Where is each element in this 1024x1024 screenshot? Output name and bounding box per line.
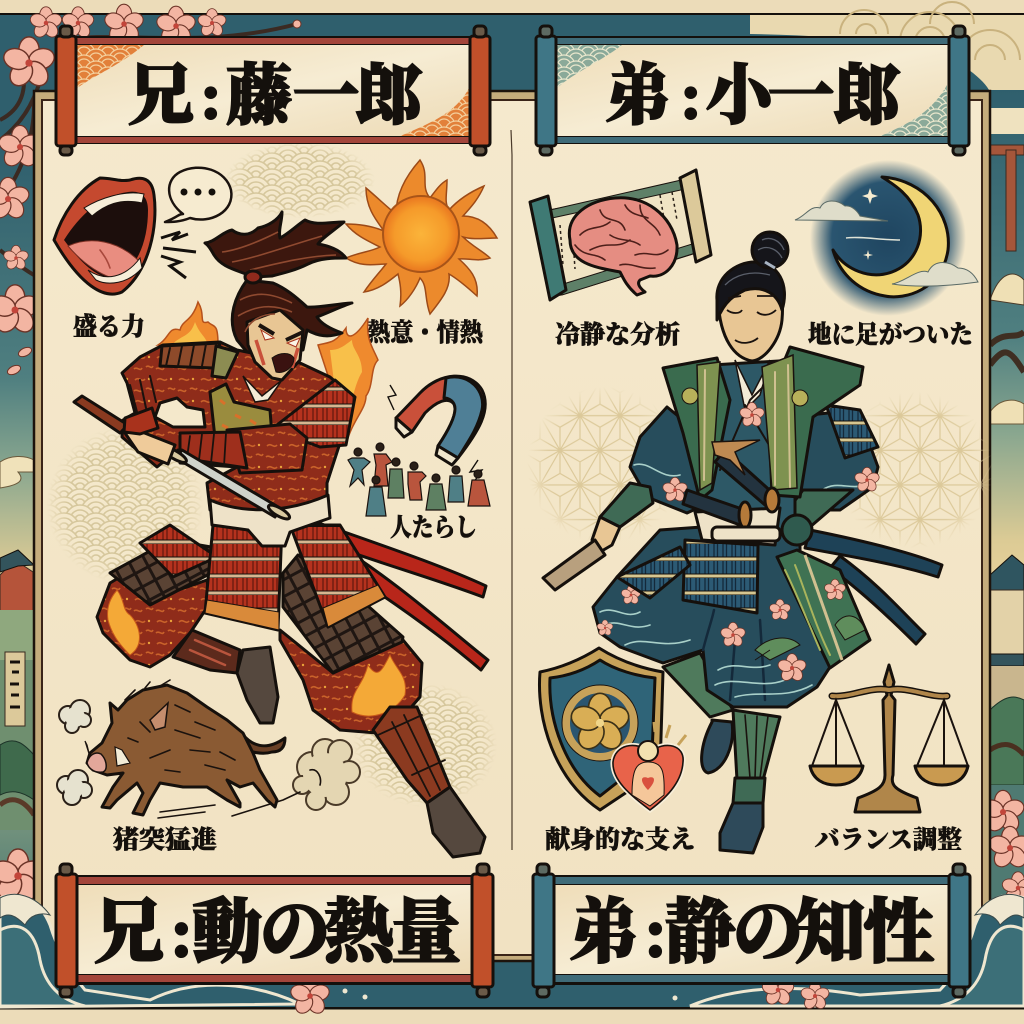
icon: charging boar bbox=[57, 680, 360, 818]
swords at waist bbox=[683, 450, 780, 541]
icon: speech bubble bbox=[165, 168, 231, 222]
banner: 弟 小一郎 bbox=[536, 26, 969, 155]
banner: 兄 動の熱量 bbox=[56, 864, 493, 997]
wooden sign bbox=[5, 652, 25, 726]
hair rear bbox=[232, 280, 352, 352]
label: 献身的な支え: 献身的な支え bbox=[545, 825, 695, 854]
icon: sun bbox=[346, 160, 497, 314]
forearm bbox=[180, 432, 247, 468]
banner: 兄 藤一郎 bbox=[56, 26, 490, 155]
kimono body bbox=[700, 360, 795, 530]
chain mesh skirts bbox=[110, 540, 217, 605]
wrist guard bbox=[782, 515, 812, 545]
upper arm stripes bbox=[130, 376, 156, 412]
icon: shouting mouth bbox=[54, 178, 155, 294]
sleeves bbox=[630, 407, 715, 513]
label: 地に足がついた: 地に足がついた bbox=[808, 321, 973, 349]
centre divider bbox=[511, 130, 512, 850]
icon: shield with crest bbox=[539, 648, 663, 810]
hand bbox=[123, 430, 175, 464]
left landscape strip bbox=[0, 150, 34, 910]
head bbox=[718, 268, 783, 361]
banner: 兄 藤一郎: 兄:藤一郎 bbox=[128, 60, 422, 133]
front shin and foot bbox=[733, 710, 780, 780]
label: 盛る力: 盛る力 bbox=[73, 312, 145, 341]
forearms bbox=[600, 483, 653, 527]
younger samurai 小一郎 bbox=[543, 232, 942, 853]
icon: balance scale bbox=[810, 665, 968, 812]
puffs of breath and dust bbox=[57, 700, 360, 816]
banner: 弟 小一郎: 弟:小一郎 bbox=[605, 60, 900, 133]
gap under arm bbox=[155, 398, 205, 427]
sleeve bbox=[227, 424, 307, 473]
rollers bbox=[56, 26, 490, 155]
rollers bbox=[536, 26, 969, 155]
shoulder guard bbox=[273, 380, 355, 447]
icon: crowd of people bbox=[348, 443, 490, 516]
face bbox=[247, 310, 303, 380]
label: 冷静な分析: 冷静な分析 bbox=[555, 321, 680, 349]
rollers bbox=[533, 864, 970, 997]
armoured torso and arm silhouette bbox=[122, 342, 353, 517]
hemp-leaf pattern circles bbox=[527, 387, 993, 548]
icon: crescent moon and night sky bbox=[795, 160, 978, 316]
sword bbox=[74, 396, 291, 521]
belly armour and sash bbox=[695, 508, 780, 545]
banner: 弟 静の知性 bbox=[533, 864, 970, 997]
collar bbox=[243, 376, 282, 402]
icon: heart with figure bbox=[613, 722, 686, 810]
icon: brain on scroll bbox=[530, 170, 711, 300]
green vest bbox=[663, 358, 730, 500]
icon: shout lines bbox=[161, 232, 196, 278]
hair plume bbox=[205, 212, 346, 277]
front leg bbox=[280, 630, 422, 733]
parchment panel bbox=[34, 91, 990, 961]
elder samurai 藤一郎 bbox=[74, 212, 488, 857]
back leg bbox=[663, 653, 733, 717]
back leg bbox=[97, 577, 210, 667]
sakura branch left bbox=[0, 4, 301, 904]
label: バランス調整: バランス調整 bbox=[815, 826, 962, 854]
label: 熱意・情熱: 熱意・情熱 bbox=[367, 319, 486, 347]
hakama bbox=[593, 520, 830, 707]
tassets bbox=[140, 525, 385, 630]
scabbards bbox=[278, 510, 488, 670]
banner: 弟 静の知性: 弟:静の知性 bbox=[569, 895, 934, 972]
bottom waves bbox=[0, 894, 1024, 1017]
sash bbox=[210, 495, 330, 546]
banner: 兄 動の熱量: 兄:動の熱量 bbox=[94, 895, 461, 972]
shoulder lames bbox=[160, 343, 220, 368]
green panel bbox=[777, 550, 870, 668]
label: 猪突猛進: 猪突猛進 bbox=[113, 826, 217, 854]
label: 人たらし: 人たらし bbox=[390, 514, 477, 542]
chest plate bbox=[210, 384, 272, 438]
sword knot bbox=[712, 440, 760, 475]
scabbards bbox=[805, 530, 942, 644]
sakura right bbox=[980, 790, 1024, 905]
right landscape strip bbox=[980, 90, 1024, 910]
wave pattern circles bbox=[47, 142, 497, 807]
rollers bbox=[56, 864, 493, 997]
hand and fan bbox=[592, 517, 620, 552]
icon: magnet bbox=[388, 376, 485, 482]
flames behind bbox=[158, 302, 378, 445]
shoulder armour bbox=[826, 405, 878, 458]
